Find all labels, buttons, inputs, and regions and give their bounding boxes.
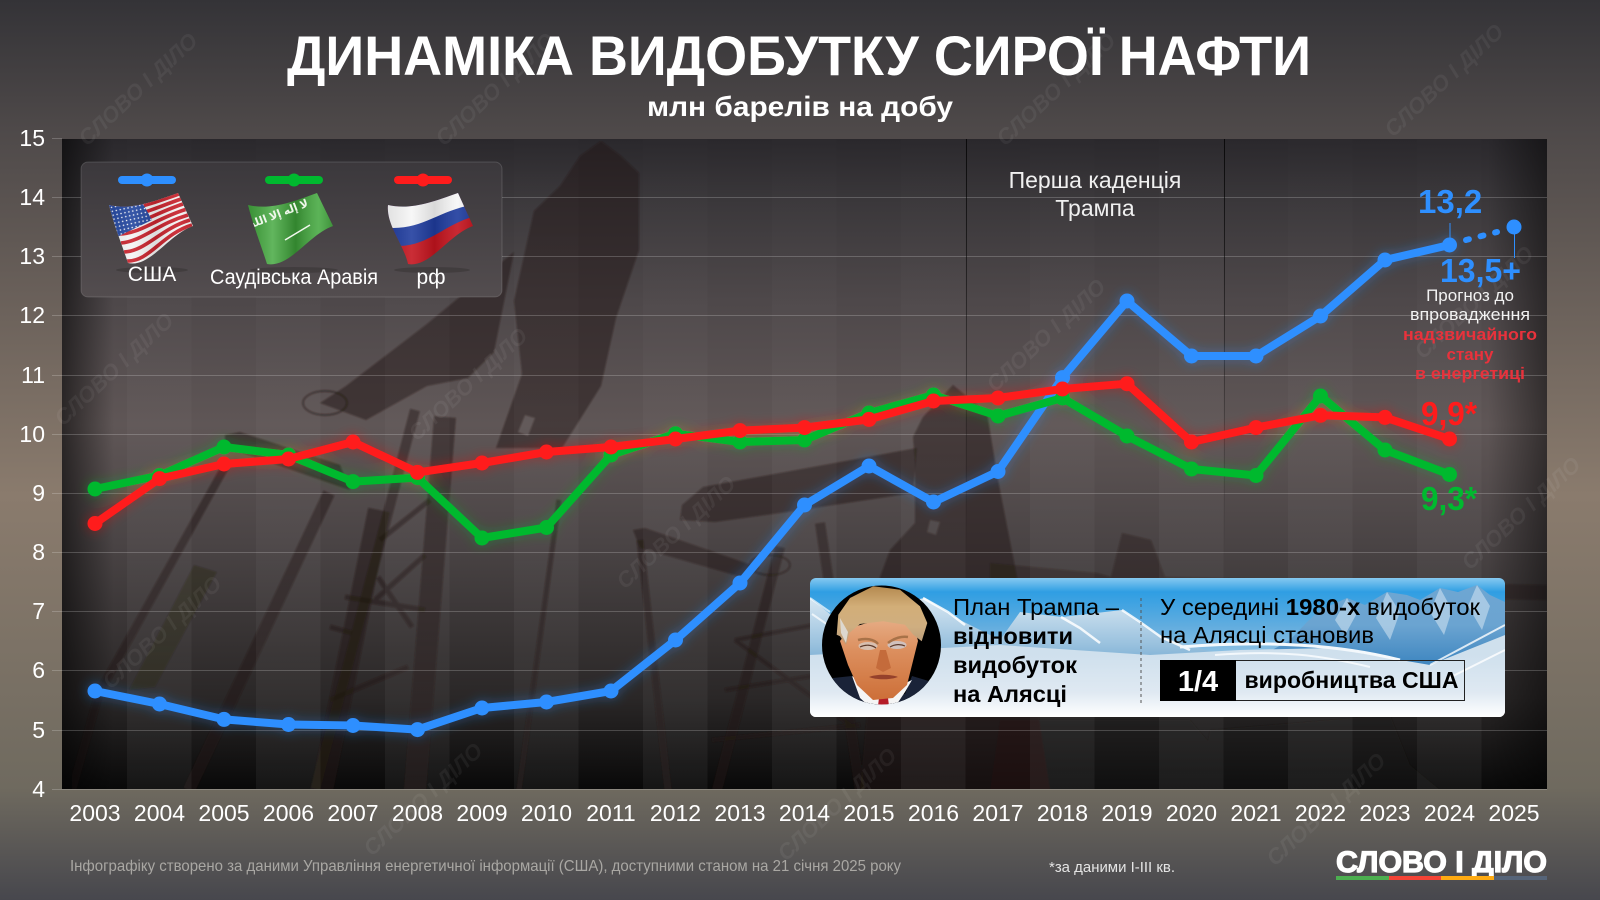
x axis labels: 2017 <box>972 800 1024 826</box>
forecast note: надзвичайного <box>1403 325 1537 344</box>
x axis labels: 2010 <box>521 800 572 826</box>
x axis labels: 2011 <box>586 800 636 826</box>
watermarks: СЛОВО І ДІЛО <box>772 743 901 866</box>
x axis labels: 2008 <box>392 800 443 826</box>
callout text: Alaska history <box>1160 594 1481 648</box>
value label: russia 2024: 9,9* <box>1421 395 1477 432</box>
legend key: Saudi Arabia <box>269 174 319 186</box>
title: ДИНАМІКА ВИДОБУТКУ СИРОЇ НАФТИ <box>287 24 1311 87</box>
y axis grid lines and labels: 9 <box>32 480 45 506</box>
legend key: russia <box>398 174 448 186</box>
x axis labels: 2004 <box>134 800 185 826</box>
watermarks: СЛОВО І ДІЛО <box>1261 748 1390 871</box>
x axis labels: 2013 <box>714 800 766 826</box>
logo: СЛОВО І ДІЛО <box>1336 846 1547 879</box>
y axis grid lines and labels: 15 <box>19 125 45 151</box>
forecast note: стану <box>1447 345 1494 364</box>
y axis grid lines and labels: 14 <box>19 184 45 210</box>
x axis labels: 2012 <box>650 800 701 826</box>
callout text: Alaska history: У середині 1980-х видобуток <box>1160 594 1481 620</box>
watermarks: СЛОВО І ДІЛО <box>981 274 1110 397</box>
x axis labels: 2024 <box>1424 800 1475 826</box>
callout text: Trump's plan <box>953 594 1119 707</box>
legend label: russia: рф <box>417 266 445 289</box>
first Trump term marker <box>966 139 1225 559</box>
x axis labels: 2019 <box>1101 800 1153 826</box>
watermarks: СЛОВО І ДІЛО <box>611 471 740 594</box>
forecast dotted line to 2025 <box>1450 220 1522 258</box>
callout text: Trump's plan: План Трампа – <box>953 594 1119 620</box>
callout stat: one quarter of US production: 1/4 <box>1178 666 1218 698</box>
y axis grid lines and labels: 10 <box>19 421 45 447</box>
y axis grid lines and labels: 11 <box>21 362 45 388</box>
callout text: Alaska history: на Алясці становив <box>1160 622 1374 648</box>
icon: Saudi flag: لا إله إلا الله <box>247 198 310 231</box>
legend label: Saudi Arabia: Саудівська Аравія <box>210 266 378 289</box>
icon: Saudi flag <box>248 193 333 264</box>
callout text: Trump's plan: видобуток <box>953 652 1077 678</box>
watermarks: СЛОВО І ДІЛО <box>97 571 226 694</box>
forecast note: впровадження <box>1410 305 1530 324</box>
watermarks: СЛОВО І ДІЛО <box>73 28 202 151</box>
x axis labels: 2006 <box>263 800 314 826</box>
flag shadows <box>116 267 470 273</box>
y axis grid lines and labels: 13 <box>19 243 45 269</box>
x axis labels: 2009 <box>456 800 508 826</box>
x axis labels: 2020 <box>1166 800 1217 826</box>
series: Saudi Arabia <box>88 388 1457 546</box>
y axis grid lines and labels: 8 <box>32 539 45 565</box>
watermarks: СЛОВО І ДІЛО <box>1379 19 1508 142</box>
first Trump term marker: Трампа <box>1055 195 1135 221</box>
x axis labels: 2021 <box>1230 800 1282 826</box>
x axis labels: 2003 <box>69 800 121 826</box>
footnote: *за даними I-III кв. <box>1049 859 1175 876</box>
watermarks: СЛОВО І ДІЛО <box>430 28 559 151</box>
forecast note <box>1403 286 1537 383</box>
watermarks: СЛОВО І ДІЛО <box>358 738 487 861</box>
legend label: USA: США <box>128 263 176 286</box>
y axis grid lines and labels: 4 <box>32 776 45 802</box>
x axis labels: 2016 <box>908 800 959 826</box>
callout stat: one quarter of US production <box>1160 660 1464 701</box>
icon: russian flag <box>388 193 473 264</box>
y axis grid lines and labels: 12 <box>19 302 45 328</box>
alternating year columns <box>127 139 1482 789</box>
plot edge vignette <box>62 139 1547 789</box>
plot background <box>62 139 1547 790</box>
y axis grid lines and labels: 7 <box>32 598 45 624</box>
watermarks: СЛОВО І ДІЛО <box>403 323 532 446</box>
panel background: Alaska mountains <box>810 578 1505 717</box>
x axis labels: 2014 <box>779 800 830 826</box>
callout stat: one quarter of US production: виробництва США <box>1244 667 1458 693</box>
callout text: Trump's plan: на Алясці <box>953 681 1067 707</box>
Alaska callout panel <box>810 578 1505 717</box>
y axis grid lines and labels: 6 <box>32 657 45 683</box>
legend key: USA <box>122 174 172 186</box>
series: russia <box>88 376 1457 531</box>
forecast note: в енергетиці <box>1415 364 1525 383</box>
legend <box>81 162 502 297</box>
x axis labels: 2022 <box>1295 800 1346 826</box>
x axis labels <box>69 800 1540 826</box>
watermarks: СЛОВО І ДІЛО <box>1409 241 1538 364</box>
watermarks: СЛОВО І ДІЛО <box>49 308 178 431</box>
forecast note: Прогноз до <box>1426 286 1514 305</box>
x axis labels: 2005 <box>198 800 250 826</box>
subtitle: млн барелів на добу <box>647 91 953 122</box>
y axis grid lines and labels: 5 <box>32 717 45 743</box>
value label: USA 2025 forecast: 13,5+ <box>1440 252 1521 289</box>
line chart <box>88 238 1457 737</box>
callout text: Trump's plan: відновити <box>953 623 1073 649</box>
x axis labels: 2023 <box>1359 800 1411 826</box>
oil pump silhouettes <box>72 141 1547 790</box>
series: USA <box>88 238 1457 737</box>
x axis labels: 2007 <box>327 800 379 826</box>
first Trump term marker: Перша каденція <box>1009 167 1181 193</box>
value label: Saudi Arabia 2024: 9,3* <box>1421 480 1477 517</box>
value label: USA 2024: 13,2 <box>1418 183 1482 220</box>
x axis labels: 2025 <box>1488 800 1540 826</box>
watermarks: СЛОВО І ДІЛО <box>1456 452 1585 575</box>
y axis grid lines and labels <box>19 125 1547 802</box>
watermarks: СЛОВО І ДІЛО <box>991 28 1120 151</box>
source note: Інфографіку створено за даними Управління енергетичної інформації (США), доступними станом на 21 січня 2025 року <box>70 858 901 875</box>
portrait of Donald Trump <box>820 585 944 708</box>
x axis labels: 2018 <box>1037 800 1088 826</box>
x axis labels: 2015 <box>843 800 895 826</box>
icon: US flag <box>109 193 193 264</box>
